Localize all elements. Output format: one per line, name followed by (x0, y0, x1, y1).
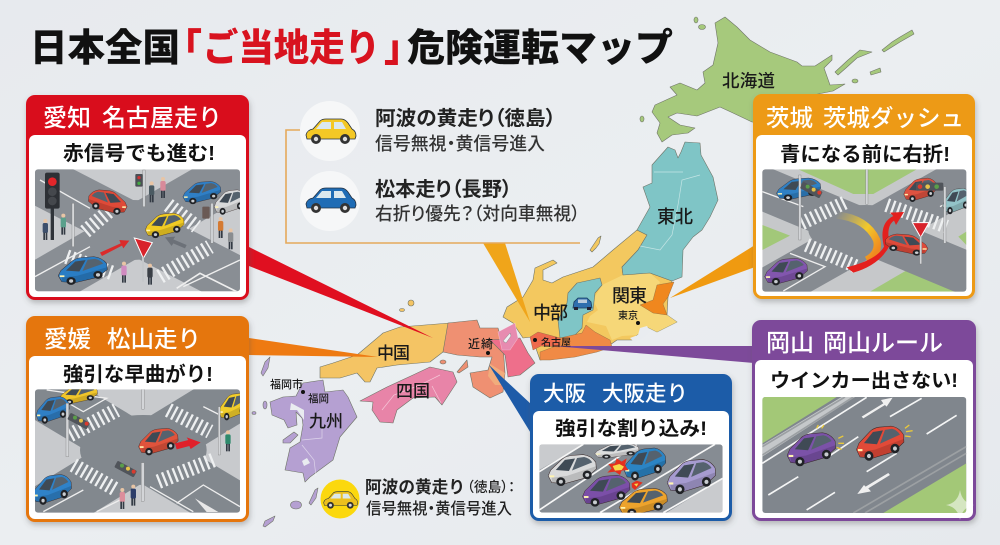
subheading: Aichi: 赤信号でも進む! (63, 142, 215, 165)
region: Chugoku (320, 323, 450, 382)
region: Shikoku (360, 367, 457, 423)
icon: blue car (300, 171, 360, 231)
heading: Ibaraki: 茨城ダッシュ (823, 105, 964, 131)
map labels: 福岡市 (270, 377, 303, 391)
region: Kinki east pink (490, 338, 535, 377)
arrow: Osaka callout pointer (489, 365, 532, 435)
region: Tohoku (622, 142, 718, 281)
legend text: Matsumoto-bashiri: 松本走り（長野） (375, 173, 512, 202)
heading: Okayama: 岡山 (766, 330, 814, 357)
region: Nagoya red-orange (530, 332, 560, 350)
icon: yellow car (300, 101, 360, 161)
bottom legend: Awa no Kibashiri: （徳島）： (467, 477, 515, 497)
map labels: 関東 (612, 286, 647, 306)
map labels (270, 71, 775, 431)
bottom legend: Awa no Kibashiri (320, 477, 515, 519)
map labels: 近綺 (468, 336, 493, 351)
map labels: 北海道 (722, 71, 775, 91)
arrow: Okayama callout pointer (553, 346, 754, 363)
arrow: Aichi callout pointer (249, 247, 433, 338)
subheading: Ehime: 強引な早曲がり! (63, 362, 213, 386)
panel: Aichi (26, 95, 249, 300)
map labels: 名古屋 (541, 336, 571, 349)
legend text: Awa no Kibashiri: 信号無視・黄信号進入 (375, 130, 545, 156)
map of Japan (252, 17, 914, 527)
panel: Osaka (530, 374, 732, 521)
scene: Matsuyama intersection (35, 389, 240, 513)
bottom legend: Awa no Kibashiri: 信号無視・黄信号進入 (366, 495, 512, 519)
region: Kanto light (587, 273, 677, 340)
title: 「 (164, 28, 202, 70)
heading: Aichi: 名古屋走り (102, 105, 222, 132)
subheading: Ibaraki: 青になる前に右折! (780, 143, 950, 166)
scene: Nagoya intersection (27, 167, 247, 293)
heading: Ehime: 愛媛 (44, 326, 91, 352)
region: Aichi and Shizuoka orange (540, 325, 612, 360)
region: Hokkaido (652, 17, 845, 142)
map labels: 中国 (377, 344, 410, 363)
subheading: Okayama: ウインカー出さない! (770, 370, 958, 392)
heading: Ehime: 松山走り (107, 326, 201, 352)
legend text: Matsumoto-bashiri (375, 173, 580, 226)
heading: Osaka: 大阪走り (602, 382, 688, 406)
heading: Osaka: 大阪 (543, 382, 586, 406)
bottom legend: Awa no Kibashiri: 阿波の黄走り (365, 477, 465, 497)
scene: Osaka traffic (539, 444, 723, 517)
title: 日本全国 (30, 28, 180, 70)
scene: Ibaraki intersection (762, 169, 966, 292)
legend text: Awa no Kibashiri (375, 102, 556, 156)
legend text: Matsumoto-bashiri: 右折り優先？（対向車無視） (375, 200, 580, 226)
region: Ibaraki orange (640, 282, 674, 315)
Tokyo bay (630, 326, 650, 342)
islands: Awaji and Seto (440, 360, 468, 373)
panel: Ibaraki (747, 94, 987, 299)
arrow: Ibaraki callout pointer (670, 245, 755, 298)
legend text: Awa no Kibashiri: 阿波の黄走り（徳島） (375, 102, 556, 131)
title: 」 (384, 28, 422, 70)
title: ご当地走り (203, 27, 380, 70)
region: Kyushu (270, 380, 357, 482)
map labels: 東京 (618, 309, 638, 322)
arrow: Ehime callout pointer (249, 338, 378, 357)
heading: Ibaraki: 茨城 (766, 105, 813, 131)
lines: Tohoku prefectures (640, 172, 700, 250)
map labels: 福岡 (308, 392, 329, 405)
heading: Okayama: 岡山ルール (823, 330, 943, 357)
map labels: 東北 (657, 207, 693, 227)
panel: Okayama (752, 320, 976, 521)
arrow: legend pointer (483, 243, 530, 322)
Lake Biwa (503, 333, 511, 343)
bay: Ariake (290, 403, 310, 466)
region: Chubu and Kanto base (503, 230, 677, 360)
scene: Okayama highway (762, 397, 966, 513)
region: Shiga pink (498, 323, 518, 350)
map labels: 九州 (309, 412, 343, 431)
islands: north (640, 17, 914, 122)
subheading: Osaka: 強引な割り込み! (555, 418, 707, 440)
islands: Kyushu (252, 236, 601, 527)
title (30, 27, 673, 70)
region: Nagano teal (558, 278, 602, 338)
title: 危険運転マップ (407, 28, 673, 70)
region: Kinki west (443, 320, 505, 398)
icon: blue car on map (573, 298, 592, 310)
panel: Ehime (20, 316, 260, 527)
map labels: 四国 (396, 382, 430, 401)
icon: sparkle (946, 490, 974, 520)
legend frame (286, 130, 580, 243)
city dots (301, 321, 640, 394)
region: Kii pale (488, 364, 505, 385)
map labels: 中部 (533, 303, 568, 323)
heading: Aichi: 愛知 (43, 105, 91, 132)
